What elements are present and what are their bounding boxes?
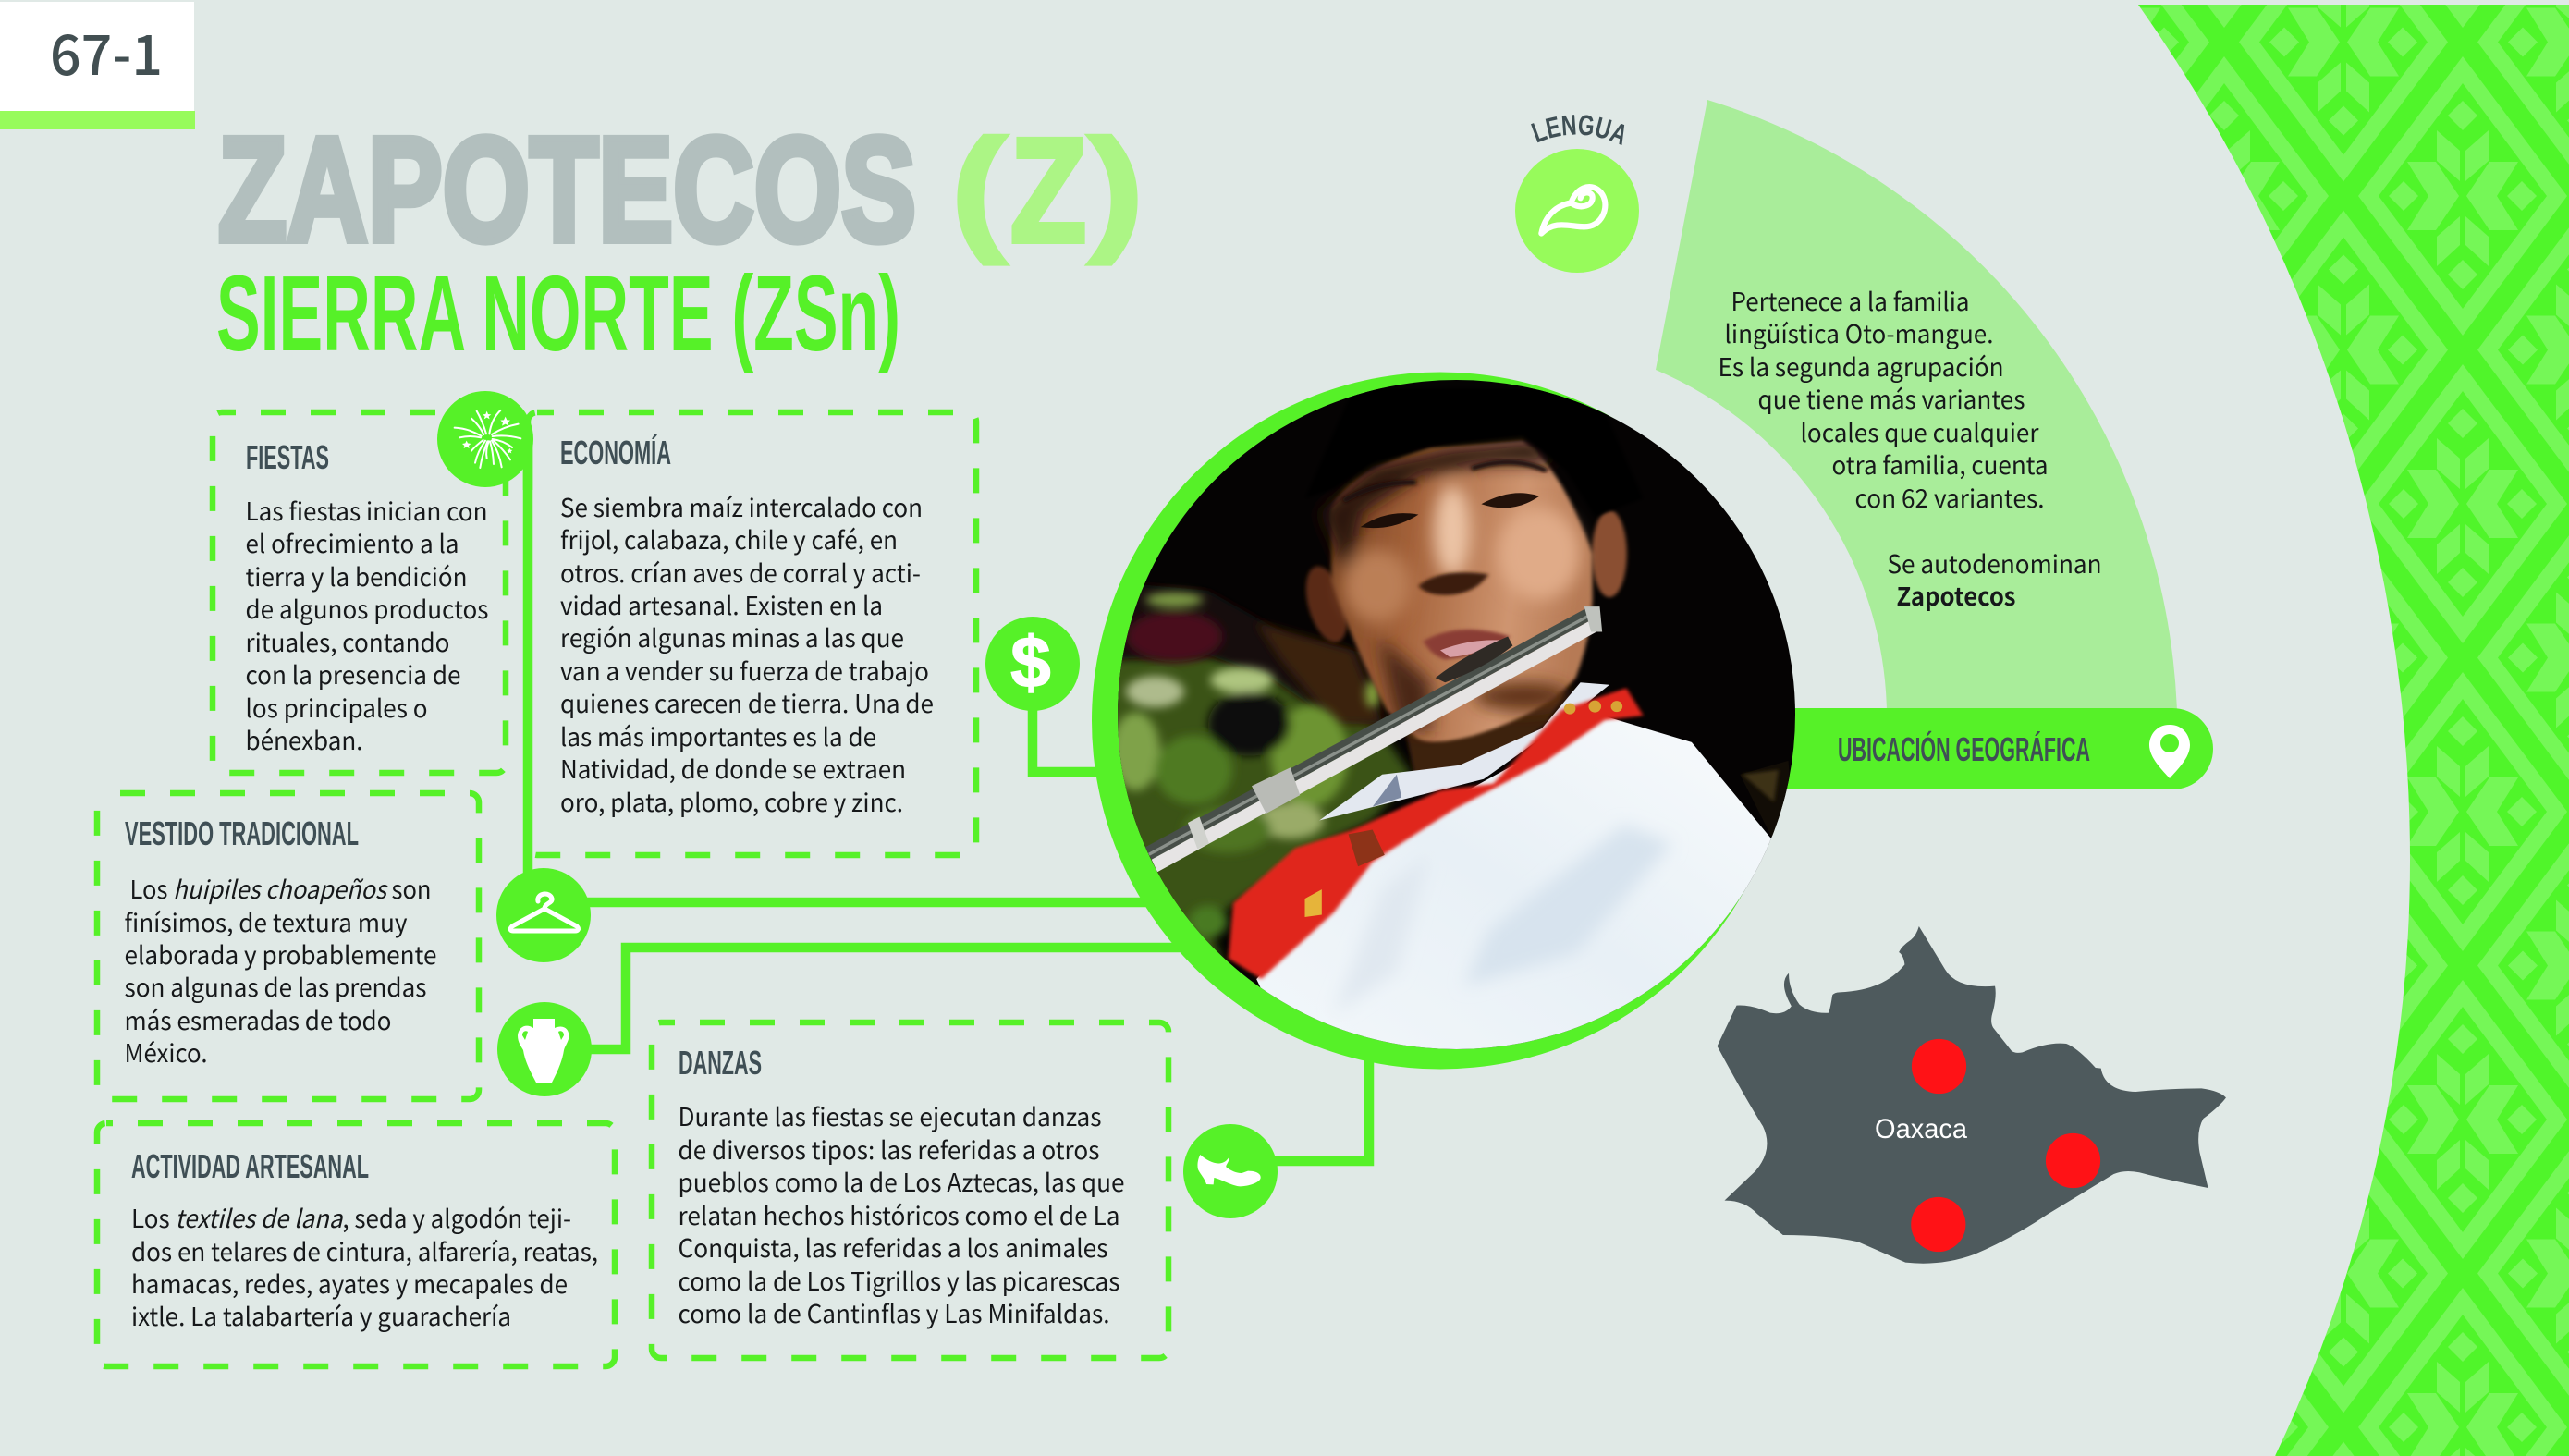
map marker bbox=[1912, 1039, 1966, 1094]
hat shadow over forehead bbox=[1330, 386, 1614, 518]
eyes and brows bbox=[1343, 483, 1416, 501]
lengua text: lingüística Oto-mangue. bbox=[1725, 314, 1993, 350]
text: danzas: Conquista, las referidas a los animales bbox=[679, 1229, 1107, 1265]
ears bbox=[1592, 510, 1627, 597]
text: economía: otros. crían aves de corral y acti- bbox=[560, 554, 921, 590]
text: economía: vidad artesanal. Existen en la bbox=[560, 586, 883, 622]
neck bbox=[1405, 680, 1572, 771]
textile pattern band bbox=[2138, 5, 2569, 1456]
photo: flute player bbox=[1091, 370, 1812, 1087]
flute bbox=[1145, 607, 1594, 860]
map marker bbox=[1911, 1197, 1965, 1252]
text: vestido tradicional: México. bbox=[124, 1034, 207, 1070]
face bbox=[1331, 441, 1593, 741]
text: danzas: como la de Los Tigrillos y las picarescas bbox=[679, 1262, 1120, 1298]
text: actividad artesanal: hamacas, redes, ayates y mecapales de bbox=[131, 1265, 568, 1301]
collar bbox=[1319, 682, 1609, 821]
shirt bbox=[1256, 717, 1771, 1049]
text: economía: van a vender su fuerza de trabajo bbox=[560, 652, 929, 688]
text: vestido tradicional: más esmeradas de todo bbox=[124, 1001, 392, 1037]
panel: vestido tradicional bbox=[97, 793, 479, 1099]
icon: vase bbox=[497, 1002, 592, 1096]
text: economía bbox=[560, 488, 934, 819]
text: fiestas: tierra y la bendición bbox=[246, 557, 468, 593]
title: ) bbox=[1087, 110, 1144, 265]
text: actividad artesanal: Los textiles de lana, seda y algodón teji- bbox=[131, 1199, 571, 1235]
title: Z bbox=[1010, 107, 1086, 273]
nose bbox=[1418, 572, 1488, 595]
map marker bbox=[2046, 1133, 2100, 1188]
page number tab bbox=[0, 2, 195, 129]
lengua text: Pertenece a la familia bbox=[1731, 282, 1969, 318]
lengua text: Se autodenominan bbox=[1888, 544, 2102, 581]
text: economía: oro, plata, plomo, cobre y zinc. bbox=[560, 783, 903, 819]
text: economía: quienes carecen de tierra. Una de bbox=[560, 684, 934, 720]
lengua text: que tiene más variantes bbox=[1758, 380, 2025, 416]
title: ( bbox=[950, 110, 1008, 265]
text: danzas: pueblos como la de Los Aztecas, las que bbox=[679, 1163, 1124, 1199]
text: danzas: como la de Cantinflas y Las Minifaldas. bbox=[679, 1294, 1109, 1330]
ubicación geográfica bar bbox=[1664, 708, 2213, 789]
ubicación geográfica bar: UBICACIÓN GEOGRÁFICA bbox=[1838, 729, 2090, 768]
text: economía: región algunas minas a las que bbox=[560, 618, 904, 655]
icon: hanger bbox=[496, 868, 591, 962]
text: vestido tradicional: Los huipiles choapeños son bbox=[129, 870, 431, 906]
lengua text: otra familia, cuenta bbox=[1832, 446, 2049, 482]
text: danzas: relatan hechos históricos como el de La bbox=[679, 1196, 1120, 1232]
lengua text bbox=[1718, 282, 2102, 613]
heading: vestido tradicional: VESTIDO TRADICIONAL bbox=[125, 814, 359, 852]
text: fiestas: con la presencia de bbox=[246, 655, 460, 691]
panel: lengua wedge bbox=[1656, 100, 2177, 712]
page number tab: 67-1 bbox=[50, 11, 163, 92]
icon: shoe bbox=[1183, 1124, 1278, 1218]
text: fiestas: Las fiestas inician con bbox=[246, 492, 488, 528]
text: fiestas: rituales, contando bbox=[246, 623, 449, 659]
connector lines bbox=[528, 434, 1369, 1161]
subtitle: SIERRA NORTE (ZSn) bbox=[216, 253, 900, 373]
icon: dollar: $ bbox=[1010, 621, 1051, 703]
text: vestido tradicional: finísimos, de textura muy bbox=[124, 903, 407, 939]
text: danzas bbox=[679, 1097, 1124, 1330]
heading: actividad artesanal: ACTIVIDAD ARTESANAL bbox=[131, 1147, 369, 1185]
text: fiestas: bénexban. bbox=[246, 721, 362, 757]
icon: dollar bbox=[985, 617, 1080, 711]
lengua text: locales que cualquier bbox=[1801, 413, 2039, 449]
scarf bbox=[1229, 688, 1644, 979]
lips bbox=[1424, 630, 1511, 659]
foliage bbox=[1107, 655, 1412, 977]
text: vestido tradicional: elaborada y probablemente bbox=[124, 936, 436, 972]
text: vestido tradicional bbox=[124, 870, 436, 1070]
text: danzas: de diversos tipos: las referidas a otros bbox=[679, 1131, 1100, 1167]
icon: location pin bbox=[2149, 725, 2190, 778]
icon: lengua: LENGUA bbox=[1531, 115, 1625, 145]
title: ZAPOTECOS bbox=[218, 106, 916, 272]
heading: danzas: DANZAS bbox=[679, 1044, 762, 1082]
map label: Oaxaca bbox=[1875, 1114, 1967, 1144]
text: economía: Natividad, de donde se extraen bbox=[560, 750, 906, 786]
map: Oaxaca bbox=[1718, 926, 2226, 1264]
text: economía: Se siembra maíz intercalado con bbox=[560, 488, 923, 524]
text: actividad artesanal bbox=[131, 1199, 598, 1333]
panel: economía bbox=[528, 412, 976, 855]
lengua text: con 62 variantes. bbox=[1854, 479, 2045, 515]
text: fiestas: los principales o bbox=[246, 689, 427, 725]
text: actividad artesanal: dos en telares de cintura, alfarería, reatas, bbox=[131, 1232, 598, 1268]
text: vestido tradicional: son algunas de las prendas bbox=[124, 968, 427, 1004]
lengua text: Es la segunda agrupación bbox=[1718, 348, 2004, 384]
text: danzas: Durante las fiestas se ejecutan danzas bbox=[679, 1097, 1102, 1133]
panel: actividad artesanal bbox=[97, 1123, 615, 1366]
panel: danzas bbox=[652, 1022, 1168, 1358]
heading: fiestas: FIESTAS bbox=[246, 438, 329, 476]
icon: lengua bbox=[1515, 115, 1639, 273]
lengua text: Zapotecos bbox=[1897, 577, 2015, 613]
text: fiestas: de algunos productos bbox=[246, 590, 488, 626]
icon: fireworks bbox=[437, 391, 533, 490]
panel: fiestas bbox=[213, 412, 506, 773]
text: actividad artesanal: ixtle. La talabartería y guarachería bbox=[131, 1297, 511, 1333]
text: economía: las más importantes es la de bbox=[560, 717, 876, 753]
text: fiestas: el ofrecimiento a la bbox=[246, 524, 459, 560]
text: fiestas bbox=[246, 492, 488, 757]
heading: economía: ECONOMÍA bbox=[560, 434, 671, 471]
text: economía: frijol, calabaza, chile y café, en bbox=[560, 520, 898, 557]
dark detail bbox=[1740, 761, 1793, 837]
